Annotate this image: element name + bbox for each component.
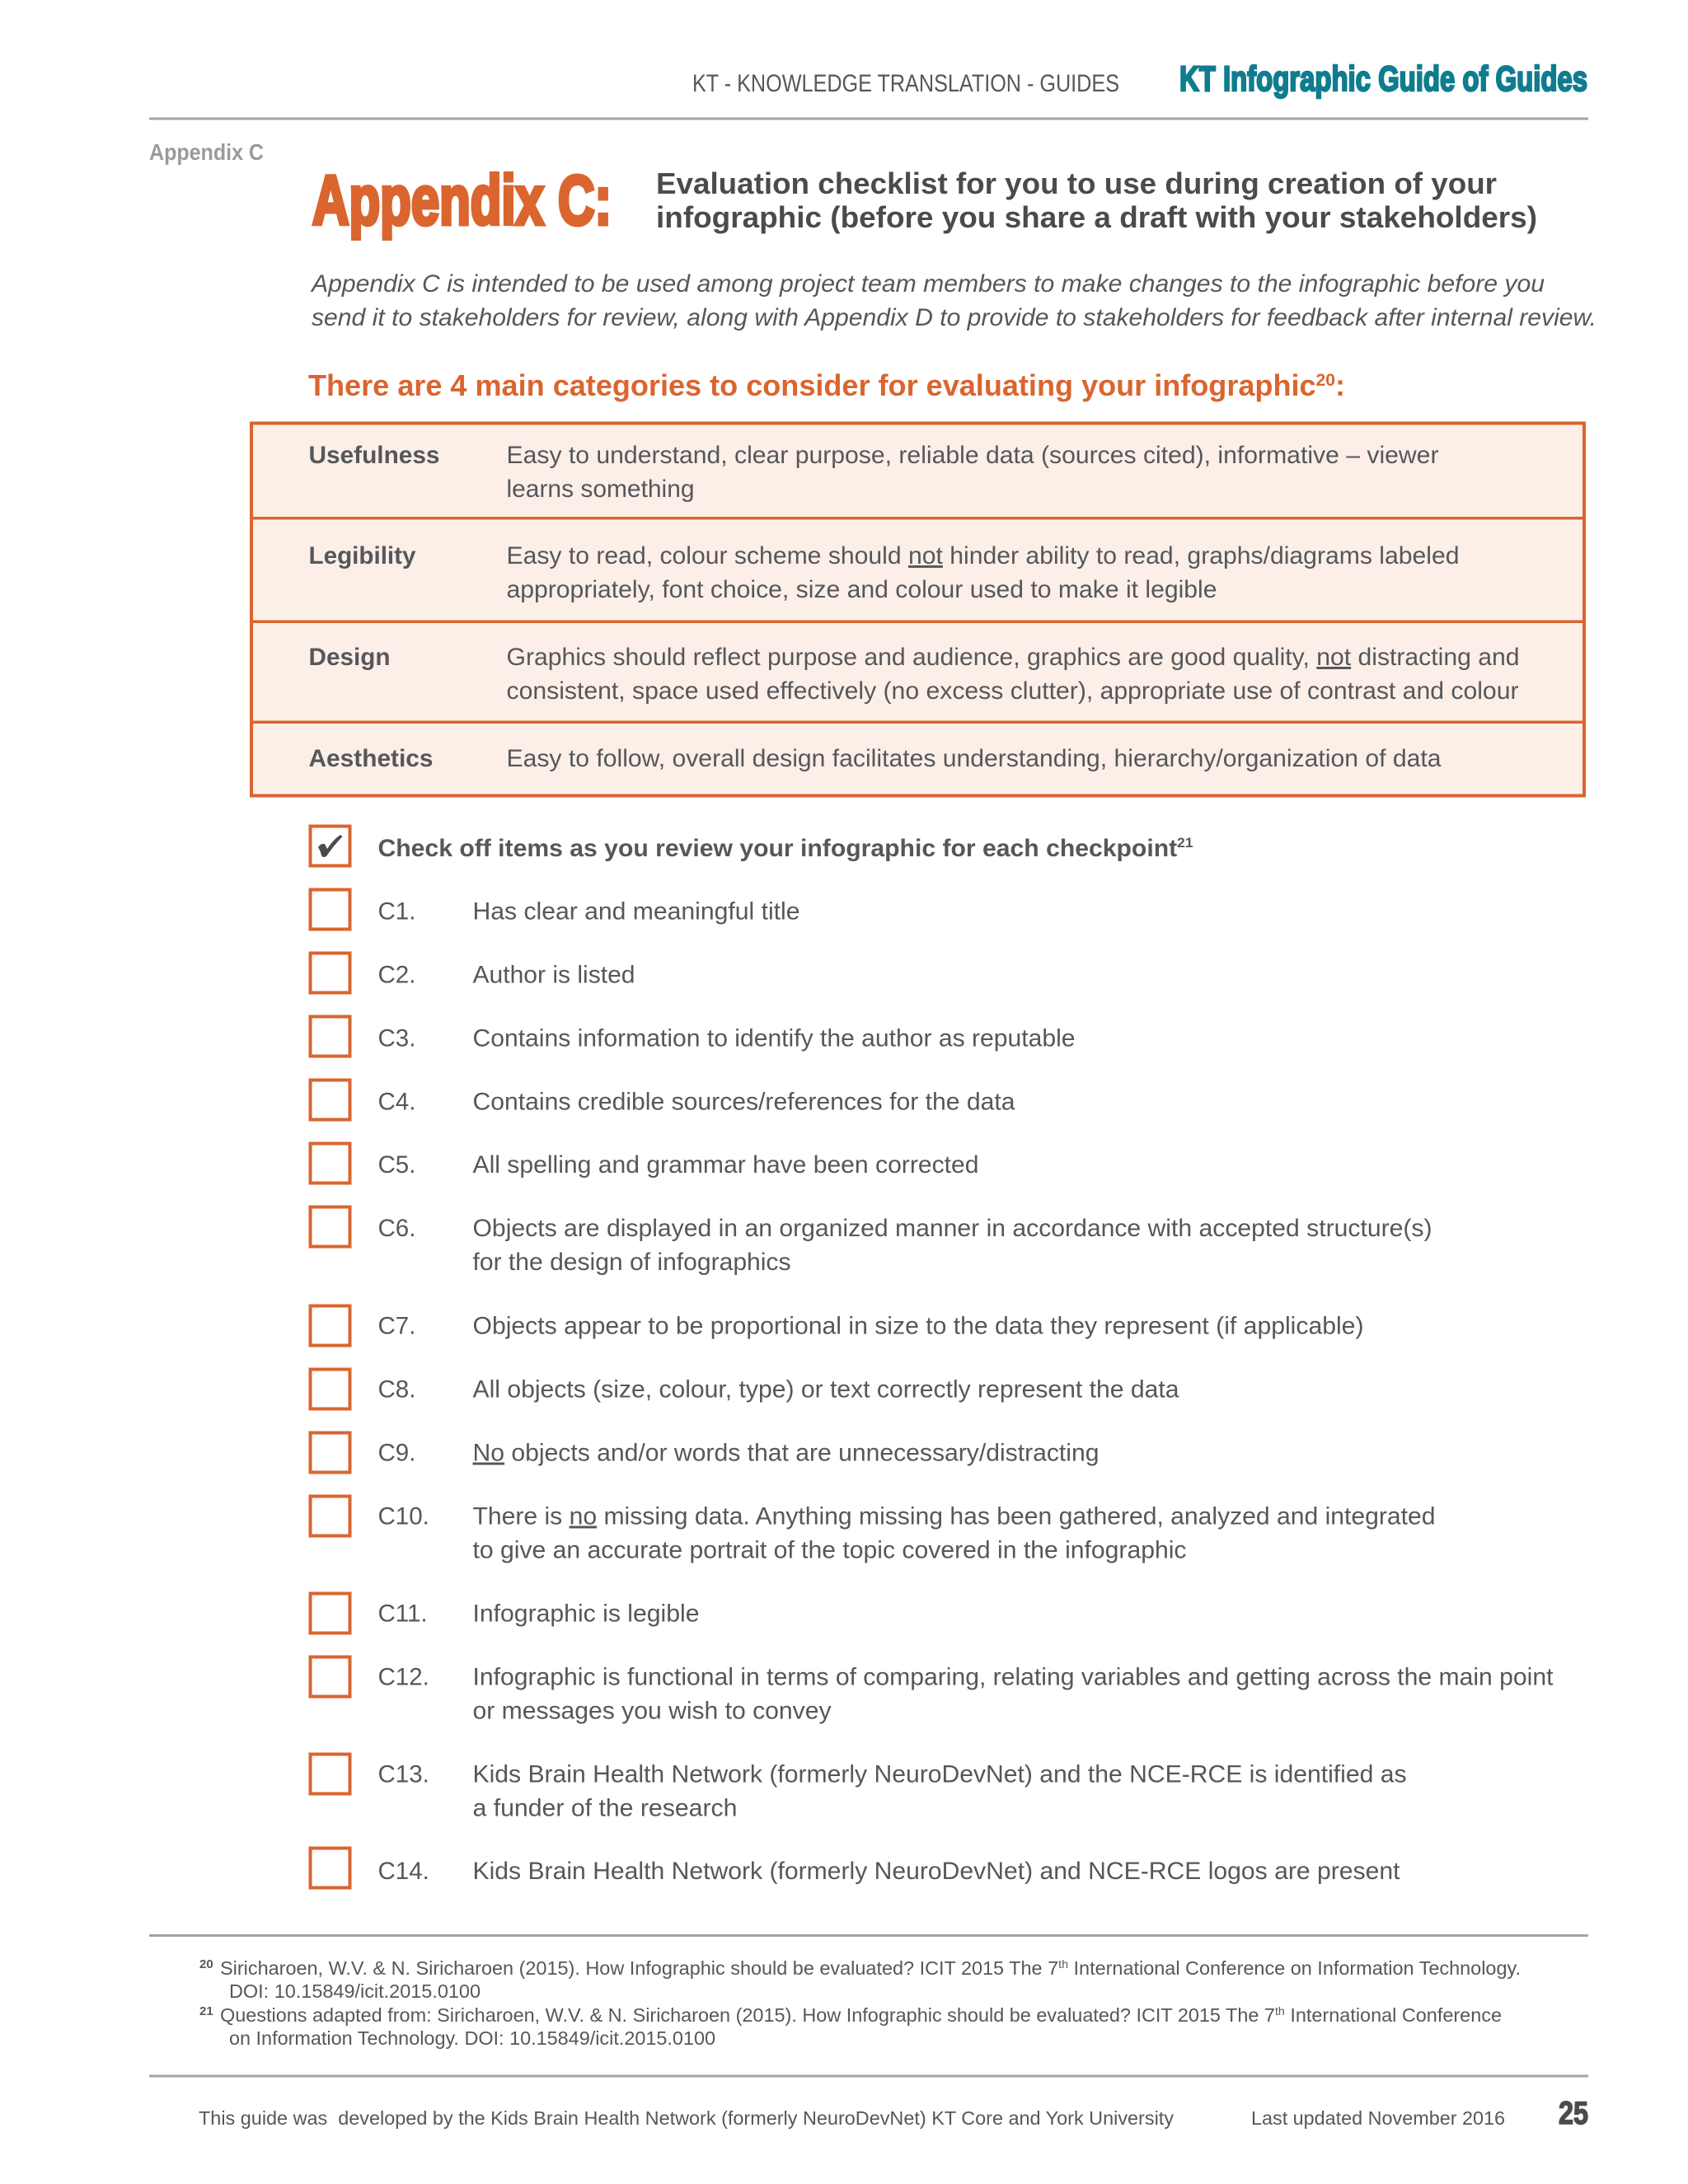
item C13: Kids Brain Health Network (formerly NeuroDevNet) and the NCE-RCE is identified as: [473, 1760, 1406, 1788]
footnotes: International Conference: [1285, 2004, 1502, 2026]
item C1: C1.: [377, 898, 415, 925]
item C8: [310, 1370, 1179, 1409]
item C3: [310, 1017, 1075, 1057]
title: Appendix C:: [312, 162, 612, 239]
item C14: C14.: [377, 1858, 429, 1885]
item C14: Kids Brain Health Network (formerly NeuroDevNet) and NCE-RCE logos are present: [473, 1858, 1400, 1885]
item C2: [310, 953, 635, 992]
row: usefulness: Easy to understand, clear purpose, reliable data (sources cited), informative – viewer: [506, 442, 1439, 469]
item C12: [310, 1657, 1553, 1724]
intro text: send it to stakeholders for review, along with Appendix D to provide to stakeholders for feedback after internal review.: [312, 304, 1597, 331]
item C5: All spelling and grammar have been corrected: [473, 1151, 979, 1179]
title: infographic (before you share a draft with your stakeholders): [656, 200, 1537, 234]
item C7: Objects appear to be proportional in size to the data they represent (if applicable): [473, 1312, 1363, 1340]
item C14: [310, 1848, 1400, 1887]
item C4: C4.: [377, 1088, 415, 1116]
item C1: Has clear and meaningful title: [473, 898, 799, 925]
row: usefulness: [308, 442, 1439, 503]
item C13: a funder of the research: [473, 1795, 737, 1821]
row: design: Design: [308, 644, 391, 671]
footnotes: th: [1058, 1957, 1068, 1971]
row: aesthetics: Aesthetics: [308, 745, 434, 772]
item C13: C13.: [377, 1760, 429, 1788]
item C2: Author is listed: [473, 961, 635, 989]
item C11: C11.: [377, 1601, 428, 1627]
page header: [149, 59, 1588, 120]
item C1: [310, 890, 799, 930]
item C11: [310, 1594, 699, 1633]
row: legibility: [308, 542, 1459, 603]
item C11: Infographic is legible: [473, 1601, 699, 1627]
title: Evaluation checklist for you to use during creation of your: [656, 166, 1497, 200]
categories heading: 20: [1316, 371, 1335, 390]
categories heading: :: [1335, 368, 1345, 402]
row: design: Graphics should reflect purpose and audience, graphics are good quality, not distracting and: [506, 644, 1520, 671]
panel: evaluation categories table: [251, 424, 1584, 796]
footnotes: International Conference on Information Technology.: [1068, 1957, 1521, 1979]
footnotes: Siricharoen, W.V. & N. Siricharoen (2015). How Infographic should be evaluated? ICIT 2015 The 7: [220, 1957, 1043, 1979]
row: design: consistent, space used effectively (no excess clutter), appropriate use of contrast and colour: [506, 677, 1519, 705]
item C6: for the design of infographics: [473, 1249, 791, 1276]
item C8: C8.: [377, 1376, 415, 1403]
item C6: [310, 1207, 1432, 1276]
row: legibility: Legibility: [308, 542, 416, 569]
title: [312, 162, 1537, 239]
item C10: C10.: [377, 1503, 429, 1530]
footnotes: on Information Technology. DOI: 10.15849/icit.2015.0100: [229, 2027, 715, 2049]
item C9: C9.: [377, 1439, 415, 1467]
item C8: All objects (size, colour, type) or text correctly represent the data: [473, 1376, 1179, 1403]
item C13: [310, 1754, 1406, 1821]
row: aesthetics: Easy to follow, overall design facilitates understanding, hierarchy/organization of data: [506, 745, 1442, 772]
row: legibility: appropriately, font choice, size and colour used to make it legible: [506, 576, 1217, 603]
item C5: C5.: [377, 1151, 415, 1179]
item C2: C2.: [377, 961, 415, 989]
footnotes: 20: [199, 1957, 213, 1971]
page footer: This guide was developed by the Kids Brain Health Network (formerly NeuroDevNet) KT Core and York University: [199, 2107, 1175, 2129]
footnotes: [149, 1934, 1588, 2049]
item C12: Infographic is functional in terms of comparing, relating variables and getting across the main point: [473, 1663, 1553, 1691]
footnotes: th: [1275, 2004, 1285, 2018]
checklist header: [310, 826, 1193, 865]
intro text: Appendix C is intended to be used among project team members to make changes to the infographic before you: [310, 270, 1545, 298]
item C5: [310, 1144, 979, 1183]
footnotes: DOI: 10.15849/icit.2015.0100: [229, 1980, 481, 2002]
panel: checklist: [310, 826, 1553, 1887]
item C6: Objects are displayed in an organized manner in accordance with accepted structure(s): [473, 1215, 1432, 1242]
section tab label: Appendix C: [149, 139, 264, 165]
item C6: C6.: [377, 1215, 415, 1242]
item C9: No objects and/or words that are unnecessary/distracting: [473, 1439, 1100, 1467]
page footer: 25: [1559, 2096, 1588, 2131]
item C4: Contains credible sources/references for the data: [473, 1088, 1015, 1116]
intro text: [310, 270, 1597, 331]
item C9: [310, 1432, 1100, 1472]
checklist header: Check off items as you review your infographic for each checkpoint: [377, 835, 1160, 862]
categories heading: There are 4 main categories to consider for evaluating your infographic: [308, 368, 1314, 402]
item C10: [310, 1497, 1436, 1564]
page footer: Last updated November 2016: [1251, 2107, 1505, 2129]
item C7: C7.: [377, 1312, 415, 1340]
page header: KT - KNOWLEDGE TRANSLATION - GUIDES: [692, 70, 1119, 97]
item C4: [310, 1080, 1015, 1119]
row: legibility: Easy to read, colour scheme should not hinder ability to read, graphs/diagrams labeled: [506, 542, 1459, 569]
item C12: C12.: [377, 1663, 429, 1691]
row: design: [308, 644, 1520, 705]
item C12: or messages you wish to convey: [473, 1698, 832, 1724]
item C3: Contains information to identify the author as reputable: [473, 1025, 1075, 1052]
footnotes: 21: [199, 2004, 213, 2018]
item C7: [310, 1305, 1363, 1345]
item C10: to give an accurate portrait of the topic covered in the infographic: [473, 1536, 1187, 1564]
page footer: [149, 2075, 1588, 2131]
item C10: There is no missing data. Anything missing has been gathered, analyzed and integrated: [473, 1503, 1436, 1530]
row: usefulness: Usefulness: [308, 442, 440, 469]
footnotes: Questions adapted from: Siricharoen, W.V. & N. Siricharoen (2015). How Infographic should be evaluated? ICIT 2015 The 7: [220, 2004, 1255, 2026]
checklist header: 21: [1177, 835, 1193, 851]
item C3: C3.: [377, 1025, 415, 1052]
row: usefulness: learns something: [506, 476, 694, 503]
